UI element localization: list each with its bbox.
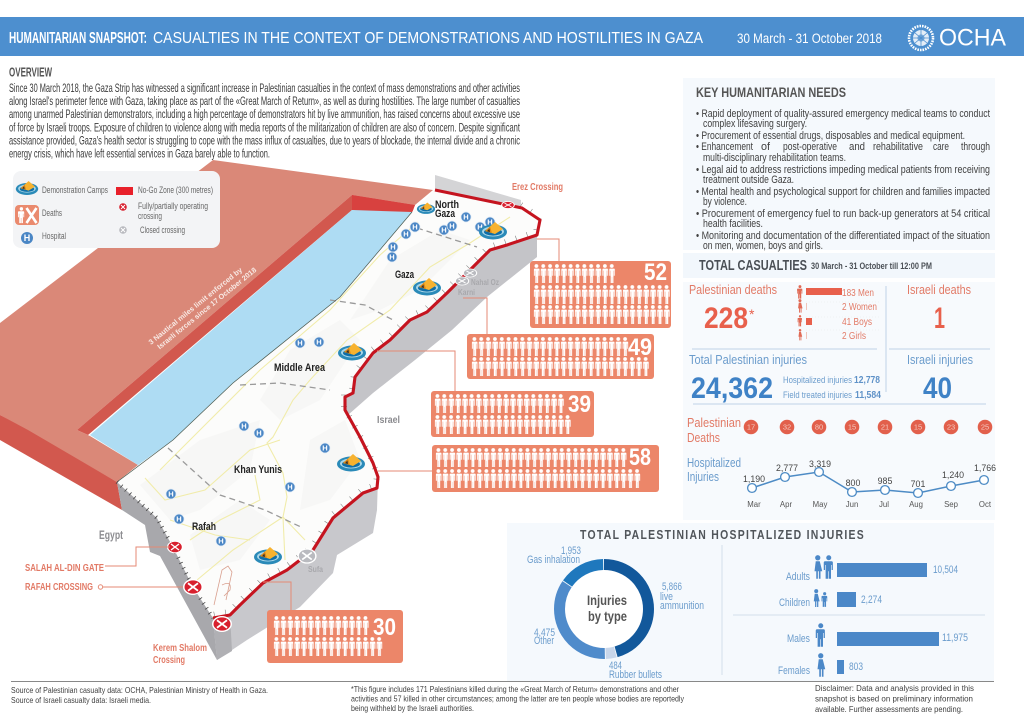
hospitals: H xyxy=(168,490,174,499)
Palestinian deaths: 228 xyxy=(704,302,748,335)
bar: females xyxy=(778,653,863,677)
hospitalized injuries line chart: Hospitalized xyxy=(687,456,741,470)
casualty box: 52: 52 xyxy=(644,259,667,286)
hospitalized injuries line chart: 800 xyxy=(846,478,860,488)
donut labels: Other xyxy=(534,635,554,647)
place labels: Gaza xyxy=(395,269,415,281)
Palestinian deaths xyxy=(689,282,777,335)
legend: Deaths xyxy=(42,208,62,219)
bar: females: Females xyxy=(778,665,810,677)
casualty box: 39 xyxy=(377,351,594,437)
donut labels: live xyxy=(660,591,673,603)
overview paragraph: of force by Israeli troops. Exposure of children to violence along with media reports of the militarization of children are also of concern. Despite significant xyxy=(9,120,520,134)
sea limit label: Israeli forces since 17 October 2018 xyxy=(155,265,258,351)
place labels: Rafah xyxy=(192,521,216,533)
hospitalized injuries line chart: 701 xyxy=(911,479,925,489)
donut labels: Gas inhalation xyxy=(527,554,580,566)
hospitals: H xyxy=(297,339,303,348)
needs list: of xyxy=(761,141,771,153)
overview paragraph xyxy=(9,81,520,160)
footer: footnote xyxy=(351,684,685,713)
coastline xyxy=(117,212,412,482)
bar: males: 11,975 xyxy=(942,632,968,644)
footer: sources: Source of Israeli casualty data: Israeli media. xyxy=(11,695,151,705)
crossing labels: SALAH AL-DIN GATE xyxy=(25,563,104,574)
casualty box: 58 xyxy=(378,444,659,492)
overview paragraph: along Israel's perimeter fence with Gaza, taking place as part of the «Great March of Return», as well as during hostilities. The large number of casualties xyxy=(9,94,520,108)
total Palestinian injuries xyxy=(689,352,881,405)
hospitals: H xyxy=(441,226,447,235)
demonstration camps xyxy=(254,202,507,564)
total Palestinian injuries: 11,584 xyxy=(855,390,881,401)
monthly Palestinian deaths: 25 xyxy=(981,423,989,432)
casualties heading: 30 March - 31 October till 12:00 PM xyxy=(811,261,932,271)
hospitals: H xyxy=(287,483,293,492)
Israeli injuries: 40 xyxy=(923,372,952,405)
icon: closed crossing xyxy=(119,226,127,234)
footer: disclaimer: Disclaimer: Data and analysis provided in this xyxy=(815,683,974,693)
monthly Palestinian deaths xyxy=(687,415,992,445)
casualty box: 30: 30 xyxy=(373,614,396,641)
bar: males xyxy=(787,623,968,647)
monthly Palestinian deaths: 15 xyxy=(914,423,922,432)
neighbouring labels: Karni xyxy=(458,288,475,297)
monthly Palestinian deaths: 21 xyxy=(881,423,889,432)
Israeli injuries xyxy=(907,352,973,405)
overview heading: OVERVIEW xyxy=(9,66,52,80)
fence with no-go zone xyxy=(117,190,540,618)
hospitalized injuries line chart: 1,240 xyxy=(942,470,964,480)
icon: no-go zone xyxy=(116,187,133,195)
donut labels: Rubber bullets xyxy=(609,669,662,681)
total Palestinian injuries: Hospitalized injuries xyxy=(783,374,852,385)
overview paragraph: Since 30 March 2018, the Gaza Strip has witnessed a significant increase in Palestinian casualties in the context of mass demonstrations and other activities xyxy=(9,81,520,95)
legend: No-Go Zone (300 metres) xyxy=(138,185,213,196)
casualties heading xyxy=(699,258,932,274)
hospitalized injuries line chart: 1,190 xyxy=(743,474,765,484)
header band xyxy=(0,17,1024,56)
map: Gaza Strip land xyxy=(117,190,540,618)
needs heading: KEY HUMANITARIAN NEEDS xyxy=(696,85,846,100)
needs list: • Enhancement xyxy=(696,141,753,153)
crossing labels: Kerem Shalom xyxy=(153,643,207,654)
deaths by demographic xyxy=(797,285,880,342)
donut labels: 4,475 xyxy=(534,627,555,639)
bar: children: 2,274 xyxy=(861,594,882,606)
donut labels: 5,866 xyxy=(662,581,682,593)
casualty box: 30 xyxy=(263,582,403,663)
needs list: multi-disciplinary rehabilitation teams. xyxy=(703,152,846,164)
casualties heading: TOTAL CASUALTIES xyxy=(699,258,807,274)
needs list xyxy=(696,108,990,252)
hospitals: H xyxy=(390,243,396,252)
icon: hospital xyxy=(21,232,33,244)
footer: disclaimer: snapshot is based on preliminary information xyxy=(815,694,973,704)
casualty box: 52 xyxy=(530,239,671,328)
hospitalized injuries line chart xyxy=(687,456,996,509)
donut labels: 484 xyxy=(609,660,622,672)
Israeli deaths: Israeli deaths xyxy=(907,282,971,297)
icon: demonstration camp xyxy=(16,181,38,195)
donut labels: ammunition xyxy=(660,600,704,612)
icon: deaths xyxy=(15,205,39,225)
Palestinian deaths: * xyxy=(749,306,755,322)
sea limit label: 3 Nautical miles limit enforced by xyxy=(147,265,244,347)
hospitals: H xyxy=(322,444,328,453)
hospitalized injuries line chart: 2,777 xyxy=(776,463,798,473)
legend: crossing xyxy=(138,211,162,222)
donut labels: 1,953 xyxy=(561,545,581,557)
donut chart: by type xyxy=(588,608,627,624)
neighbouring labels: Egypt xyxy=(99,530,123,542)
crossing labels: Crossing xyxy=(153,655,185,666)
Rafah airport outline xyxy=(214,566,232,605)
bar: adults: Adults xyxy=(786,571,810,583)
total Palestinian injuries: Total Palestinian injuries xyxy=(689,352,807,367)
crossing labels: RAFAH CROSSING xyxy=(25,582,93,593)
casualty box: 49 xyxy=(463,298,654,379)
donut labels xyxy=(527,545,704,681)
hospitalized injuries line chart: May xyxy=(813,500,827,509)
needs list: post-operative xyxy=(783,141,837,153)
bar: adults xyxy=(786,555,958,583)
total Palestinian injuries: Field treated injuries xyxy=(783,389,852,400)
Israeli deaths: 1 xyxy=(934,302,945,335)
deaths by demographic: 183 Men xyxy=(842,287,874,299)
legend xyxy=(13,171,220,248)
hospitalized injuries line chart: Injuries xyxy=(687,470,719,484)
total Palestinian injuries: 24,362 xyxy=(691,372,773,405)
crossing leader lines xyxy=(98,547,183,589)
deaths by demographic: 2 Girls xyxy=(842,330,866,342)
needs list: and xyxy=(849,141,865,153)
hospitalized injuries line chart: 985 xyxy=(878,476,892,486)
monthly Palestinian deaths: Palestinian xyxy=(687,415,741,430)
deaths by demographic: 41 Boys xyxy=(842,316,872,328)
hospitalized injuries line chart: 1,766 xyxy=(974,463,996,473)
place labels xyxy=(192,199,459,533)
panel heading: TOTAL PALESTINIAN HOSPITALIZED INJURIES xyxy=(580,527,865,542)
hospitals: H xyxy=(449,222,455,231)
casualty box: 58: 58 xyxy=(629,444,651,471)
footer: sources xyxy=(11,685,268,705)
hospitalized injuries line chart: Jun xyxy=(846,500,858,509)
casualty box: 49: 49 xyxy=(628,334,652,361)
date range: 30 March - 31 October 2018 xyxy=(737,31,882,46)
monthly Palestinian deaths: 23 xyxy=(947,423,955,432)
bar: children: Children xyxy=(779,597,810,609)
monthly Palestinian deaths: 80 xyxy=(815,423,823,432)
needs list: on men, women, boys and girls. xyxy=(703,240,823,252)
monthly Palestinian deaths: Deaths xyxy=(687,430,720,445)
hospitals: H xyxy=(412,223,418,232)
title: HUMANITARIAN SNAPSHOT: xyxy=(9,30,147,47)
overview paragraph: assistance provided, Gaza's health sector is struggling to cope with the mass influx of casualties, due to years of blockade, the internal divide and a chronic xyxy=(9,134,520,148)
wall: east xyxy=(213,235,537,660)
sea restriction zone xyxy=(0,160,433,510)
footer: sources: Source of Palestinian casualty data: OCHA, Palestinian Ministry of Health in Gaza. xyxy=(11,685,268,695)
needs list: through xyxy=(961,141,990,153)
deaths by demographic: 2 Women xyxy=(842,301,877,313)
place labels: Middle Area xyxy=(274,362,326,374)
casualty box: 39: 39 xyxy=(568,391,591,418)
footer: footnote: activities and 57 killed in other circumstances; among the latter are ten people whose bodies are reportedly xyxy=(351,694,685,704)
panel: total Palestinian hospitalized injuries xyxy=(507,523,994,681)
footer: footnote: *This figure includes 171 Palestinians killed during the «Great March of Return» demonstrations and other xyxy=(351,684,679,694)
footer: disclaimer: available. Further assessments are pending. xyxy=(815,704,963,714)
bar: males: Males xyxy=(787,633,810,645)
Israeli deaths xyxy=(907,282,971,335)
hospitals: H xyxy=(176,515,182,524)
bar: adults: 10,504 xyxy=(933,564,958,576)
icon: OCHA logo xyxy=(909,24,1006,52)
Israeli injuries: Israeli injuries xyxy=(907,352,973,367)
hospitals: H xyxy=(316,338,322,347)
legend: Demonstration Camps xyxy=(42,185,108,196)
crossing labels xyxy=(25,182,563,666)
hospitals: H xyxy=(218,537,224,546)
neighbouring labels: Israel xyxy=(377,414,400,426)
hospitals: H xyxy=(256,429,262,438)
sea xyxy=(90,210,412,465)
neighbouring labels: Sufa xyxy=(308,565,323,574)
monthly Palestinian deaths: 32 xyxy=(783,423,791,432)
needs list: rehabilitative xyxy=(873,141,923,153)
Palestinian deaths: Palestinian deaths xyxy=(689,282,777,297)
needs list: complex lifesaving surgery. xyxy=(703,118,807,130)
place labels: Khan Yunis xyxy=(234,464,282,476)
bar: children xyxy=(779,589,882,609)
hospitals xyxy=(166,212,495,546)
needs list: health facilities. xyxy=(703,218,763,230)
needs list: by violence. xyxy=(703,196,747,208)
overview paragraph: energy crisis, which have left essential services in Gaza barely able to function. xyxy=(9,146,270,160)
total Palestinian injuries: 12,778 xyxy=(854,375,880,386)
needs list: • Procurement of essential drugs, disposables and medical equipment. xyxy=(696,130,965,142)
hospitals: H xyxy=(463,213,469,222)
governorate boundaries xyxy=(168,228,477,528)
donut chart: Injuries xyxy=(587,592,627,608)
monthly Palestinian deaths: 15 xyxy=(848,423,856,432)
hospitals: H xyxy=(477,223,483,232)
wall: north xyxy=(435,175,521,210)
neighbouring labels: Nahal Oz xyxy=(471,278,499,287)
neighbouring labels xyxy=(99,278,499,574)
hospitalized injuries line chart: Apr xyxy=(780,500,792,509)
panel: key humanitarian needs xyxy=(683,78,995,252)
place labels: North xyxy=(435,199,459,211)
roads xyxy=(145,217,510,580)
title: CASUALTIES IN THE CONTEXT OF DEMONSTRATIONS AND HOSTILITIES IN GAZA xyxy=(153,30,704,47)
bar: females: 803 xyxy=(849,661,863,673)
hospitalized injuries line chart: Jul xyxy=(879,500,889,509)
footer: footnote: being withheld by the Israeli authorities. xyxy=(351,703,474,713)
hospitalized injuries line chart: Sep xyxy=(944,500,959,509)
hospitalized injuries line chart: Aug xyxy=(909,500,923,509)
icon: hospital: H xyxy=(24,233,30,243)
panel: total casualties xyxy=(683,253,996,520)
needs list: treatment outside Gaza. xyxy=(703,174,794,186)
place labels: Gaza xyxy=(435,208,456,220)
hospitals: H xyxy=(487,218,493,227)
hospitalized injuries line chart: Mar xyxy=(747,500,761,509)
crossing labels: Erez Crossing xyxy=(512,182,563,193)
monthly Palestinian deaths: 17 xyxy=(747,423,755,432)
hospitals: H xyxy=(241,422,247,431)
legend: Hospital xyxy=(42,231,66,242)
hospitals: H xyxy=(389,253,395,262)
legend: Closed crossing xyxy=(140,225,185,236)
hospitalized injuries line chart: 3,319 xyxy=(809,459,831,469)
footer: disclaimer xyxy=(815,683,974,714)
crossings xyxy=(167,201,515,632)
legend: Fully/partially operating xyxy=(138,201,208,212)
icon: operating crossing xyxy=(119,203,127,211)
donut chart xyxy=(560,564,648,654)
wall: west xyxy=(117,482,217,660)
hospitals: H xyxy=(403,230,409,239)
hospitalized injuries line chart: Oct xyxy=(979,500,992,509)
icon: OCHA logo: OCHA xyxy=(939,24,1006,52)
overview paragraph: among unarmed Palestinian demonstrators, including a high percentage of demonstrators hit by live ammunition, has raised concerns about excessive use xyxy=(9,107,520,121)
needs list: care xyxy=(933,141,949,153)
